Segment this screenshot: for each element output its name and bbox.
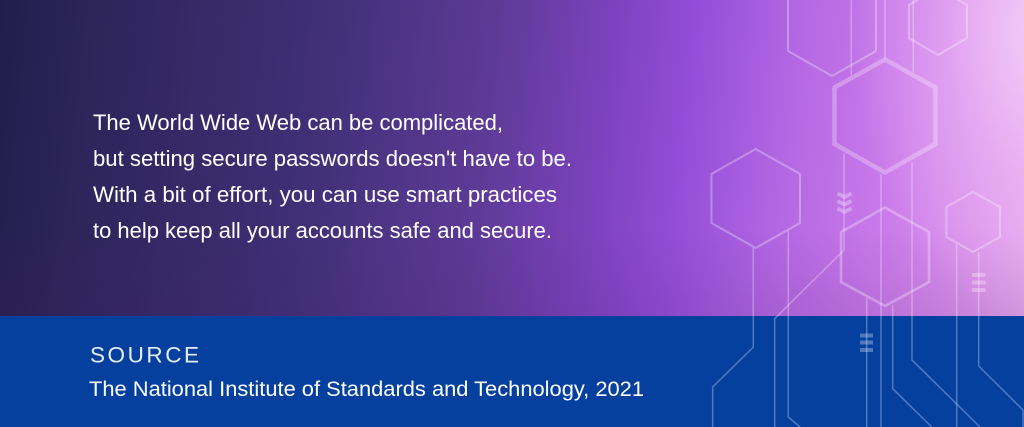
hexagon circuit decoration bbox=[712, 0, 1023, 427]
icon: tick bars right bbox=[972, 275, 986, 290]
line 4: to help keep all your accounts safe and secure. bbox=[93, 218, 552, 243]
line 2: but setting secure passwords doesn't have to be. bbox=[93, 146, 572, 171]
intro text block bbox=[93, 110, 572, 243]
line 1: The World Wide Web can be complicated, bbox=[93, 110, 503, 135]
hexagon: large centre bbox=[834, 60, 936, 172]
source band bbox=[0, 316, 1024, 427]
source heading: SOURCE bbox=[90, 342, 199, 368]
gradient background panel bbox=[0, 0, 1024, 316]
hexagon: lower centre bbox=[841, 208, 929, 306]
hexagon: top left bbox=[788, 0, 876, 76]
line 3: With a bit of effort, you can use smart practices bbox=[93, 182, 557, 207]
hexagon: left bbox=[712, 149, 800, 248]
hexagon: top right bbox=[909, 0, 967, 55]
icon: tick bars centre bbox=[860, 336, 873, 350]
hexagon: right bbox=[946, 192, 1000, 252]
icon: chevrons bbox=[838, 194, 852, 212]
source citation: The National Institute of Standards and Technology, 2021 bbox=[89, 377, 644, 401]
circuit lines bbox=[713, 0, 1023, 427]
